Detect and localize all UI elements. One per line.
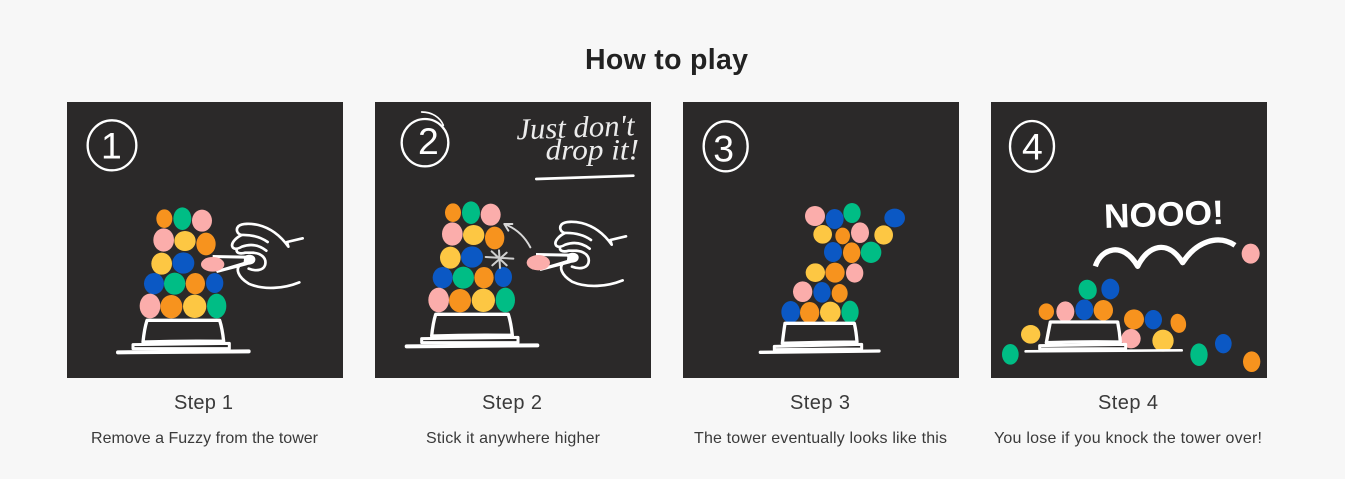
- panel: step 3: [683, 102, 959, 378]
- caption: step 2: Step 2: [482, 392, 542, 414]
- caption: step 3: The tower eventually looks like this: [694, 430, 947, 447]
- fallen Fuzzies: [1002, 244, 1260, 372]
- bounce trail: [1095, 240, 1235, 266]
- handwritten note: drop it!: [546, 133, 639, 166]
- icon: circled number 2: 2: [418, 120, 439, 162]
- icon: circled number 3: 3: [713, 127, 734, 169]
- icon: circled number 4: [1010, 121, 1054, 172]
- caption: step 3: Step 3: [790, 392, 850, 414]
- caption: step 4: You lose if you knock the tower over!: [994, 430, 1262, 447]
- caption: step 2: [426, 392, 601, 447]
- panel: step 2: [375, 102, 651, 378]
- caption: step 1: Remove a Fuzzy from the tower: [91, 430, 319, 447]
- icon: circled number 2: [402, 112, 448, 166]
- caption: step 4: [994, 392, 1262, 447]
- icon: circled number 4: 4: [1022, 126, 1043, 168]
- icon: circled number 3: [704, 121, 748, 171]
- tower base: [760, 323, 879, 352]
- icon: hand holding Fuzzy: [527, 222, 626, 286]
- caption: step 1: [91, 392, 319, 447]
- icon: circled number 1: [88, 120, 136, 170]
- caption: step 3: [694, 392, 947, 447]
- leaning tower of Fuzzies: [781, 203, 905, 323]
- icon: circled number 1: 1: [101, 125, 122, 167]
- panel: step 4: [991, 102, 1267, 378]
- panel: step 1: [67, 102, 343, 378]
- title: How to play: [585, 44, 748, 76]
- caption: step 2: Stick it anywhere higher: [426, 430, 601, 447]
- handwritten note: [516, 109, 639, 179]
- tower of Fuzzies: [140, 207, 226, 318]
- tower base: [1026, 322, 1182, 351]
- caption: step 4: Step 4: [1098, 392, 1158, 414]
- exclamation: NOOO!: [1103, 194, 1225, 236]
- handwritten note: Just don't: [516, 109, 636, 146]
- tower of Fuzzies: [428, 201, 515, 312]
- tower base: [118, 320, 249, 352]
- arrow: [504, 224, 530, 247]
- caption: step 1: Step 1: [174, 392, 233, 414]
- icon: spark where Fuzzy was removed: [486, 250, 513, 268]
- tower base: [407, 314, 537, 346]
- icon: hand holding Fuzzy: [201, 224, 303, 288]
